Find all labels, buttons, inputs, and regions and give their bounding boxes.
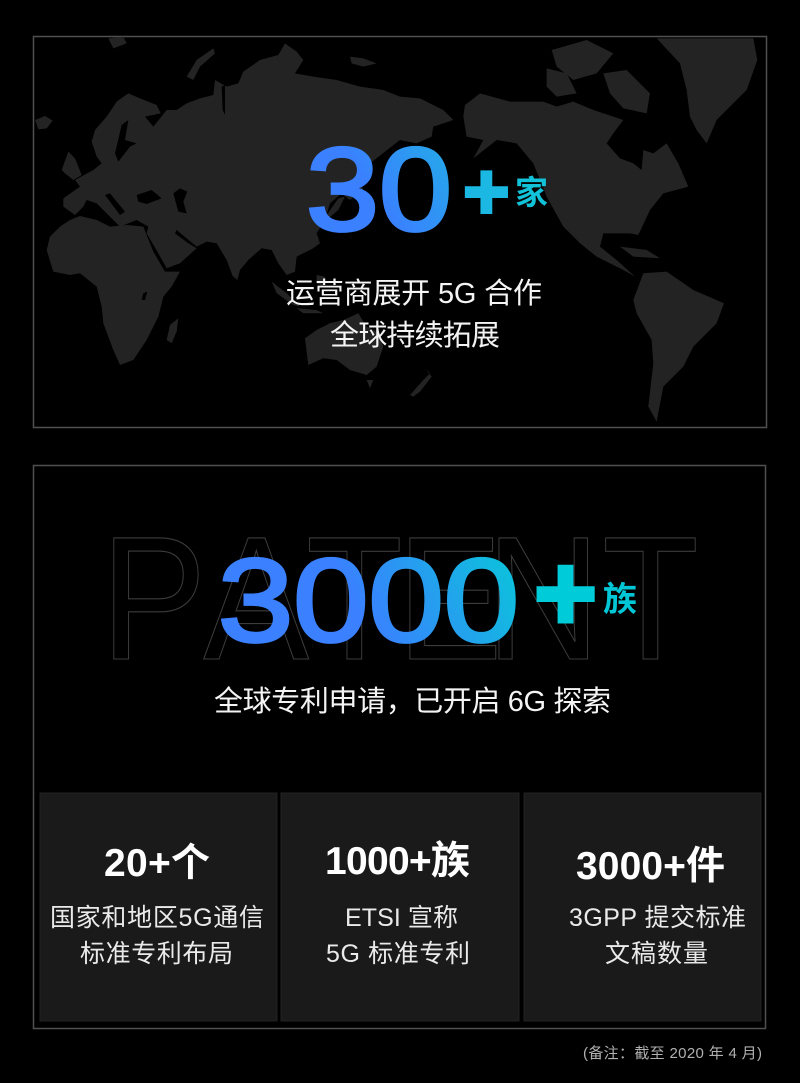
caption: patents: 全球专利申请，已开启 6G 探索 [214,685,611,718]
footnote: (备注：截至 2020 年 4 月) [583,1045,762,1062]
card: 3000+: 文稿数量 [605,940,708,968]
card: 20+: 20+个 [104,842,210,885]
panel: patents [34,466,766,1028]
big number 3000+ [218,532,637,667]
card: 1000+: 5G 标准专利 [326,940,470,968]
card: 1000+ [281,793,519,1021]
card: 1000+: 1000+族 [325,840,470,883]
card: 3000+: 3GPP 提交标准 [569,904,746,932]
card: 1000+: ETSI 宣称 [345,904,458,932]
caption: operators: 运营商展开 5G 合作 [286,277,542,310]
card: 3000+: 3000+件 [576,845,725,888]
world map [35,37,757,422]
big number 3000+: 族 [603,581,637,619]
big number 30+ [306,124,548,256]
big number 30+: + [463,147,510,236]
panel: global operators [34,36,766,428]
caption: operators [286,277,542,352]
card: 3000+ [524,793,761,1021]
card: 20+: 国家和地区5G通信 [50,904,264,932]
outlined word PATENT: PATENT [101,500,699,697]
caption: operators: 全球持续拓展 [330,319,500,352]
card: 20+: 标准专利布局 [80,940,233,968]
big number 3000+: + [534,532,597,653]
big number 30+: 30 [306,124,452,256]
card: 20+ [40,793,277,1021]
big number 3000+: 3000 [218,535,519,667]
big number 30+: 家 [515,174,548,211]
